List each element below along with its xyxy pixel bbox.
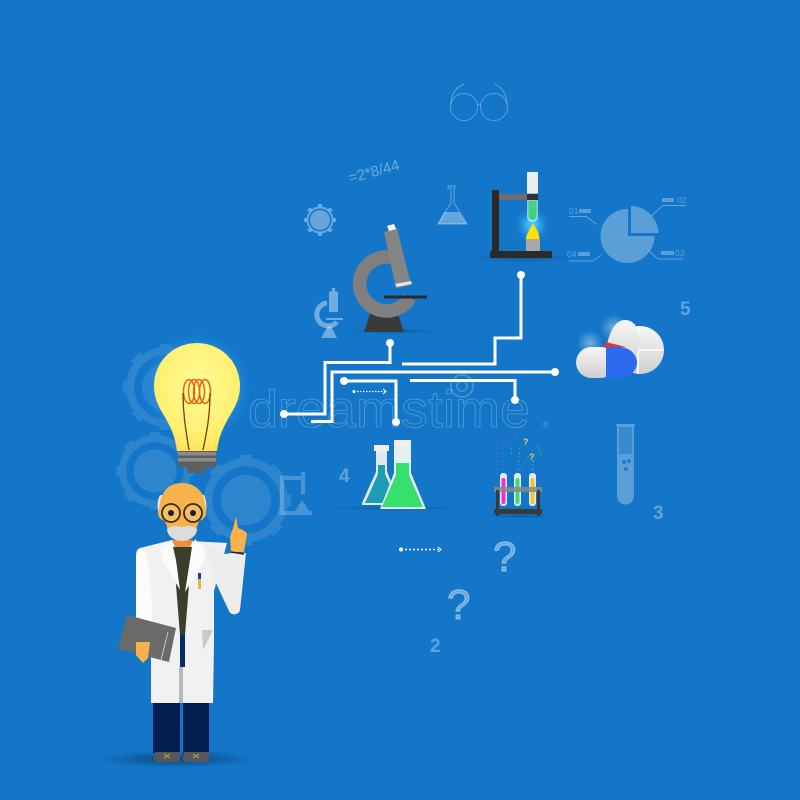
question mark upper: ? [493, 533, 516, 580]
beard [167, 526, 197, 541]
shoes [154, 752, 180, 762]
chart: faint pie chart: 03 [675, 248, 685, 258]
icon: test tube rack: ? [529, 452, 534, 462]
shirt [173, 547, 192, 635]
number 3: 3 [653, 503, 664, 524]
head [158, 483, 206, 540]
icon: faint flask [438, 186, 467, 224]
hair [158, 495, 206, 517]
pen [198, 573, 201, 589]
number 4: 4 [339, 466, 350, 487]
coat side shading [136, 548, 152, 640]
icon: faint microscope [317, 288, 343, 338]
icon: test tube rack: ? [523, 437, 528, 447]
watermark: dreamstime: dreamstime [248, 381, 530, 439]
legs [153, 700, 180, 753]
number 2: 2 [430, 636, 441, 657]
icon: microscope [345, 224, 441, 334]
icon: pills [576, 314, 664, 378]
scientist figure [100, 483, 256, 768]
raised hand [230, 517, 247, 552]
chart: faint pie chart: 02 [677, 195, 687, 205]
dotted arrow upper [352, 389, 386, 394]
trouser gap [180, 635, 185, 667]
dotted arrow lower [399, 547, 441, 552]
icon: burner stand [470, 172, 574, 262]
icon: light bulb [139, 329, 255, 473]
icon: test tube rack [482, 436, 554, 518]
lab coat body [136, 540, 227, 703]
watermark: dreamstime: ® [542, 420, 549, 430]
formula text: =2*8/44 [347, 157, 401, 187]
chart: faint pie chart [567, 195, 687, 263]
chart: faint pie chart: 01 [569, 206, 579, 216]
chart: faint pie chart: 04 [567, 249, 577, 259]
number 5: 5 [680, 299, 691, 320]
circuit lines [280, 271, 559, 426]
floor shadow [100, 750, 256, 768]
neck [172, 540, 193, 547]
glasses [162, 504, 202, 522]
icon: faint stand [279, 472, 312, 513]
left hand [136, 642, 150, 663]
clipboard [118, 615, 176, 662]
raised sleeve [205, 543, 246, 614]
pocket [202, 630, 213, 650]
lapels [160, 539, 205, 592]
icon: faint sun gear [297, 197, 343, 243]
icon: flasks [327, 440, 463, 511]
icon: faint test tube [616, 424, 635, 504]
question mark lower: ? [447, 581, 470, 628]
icon: faint glasses [450, 84, 508, 120]
gears behind the bulb [100, 326, 310, 564]
